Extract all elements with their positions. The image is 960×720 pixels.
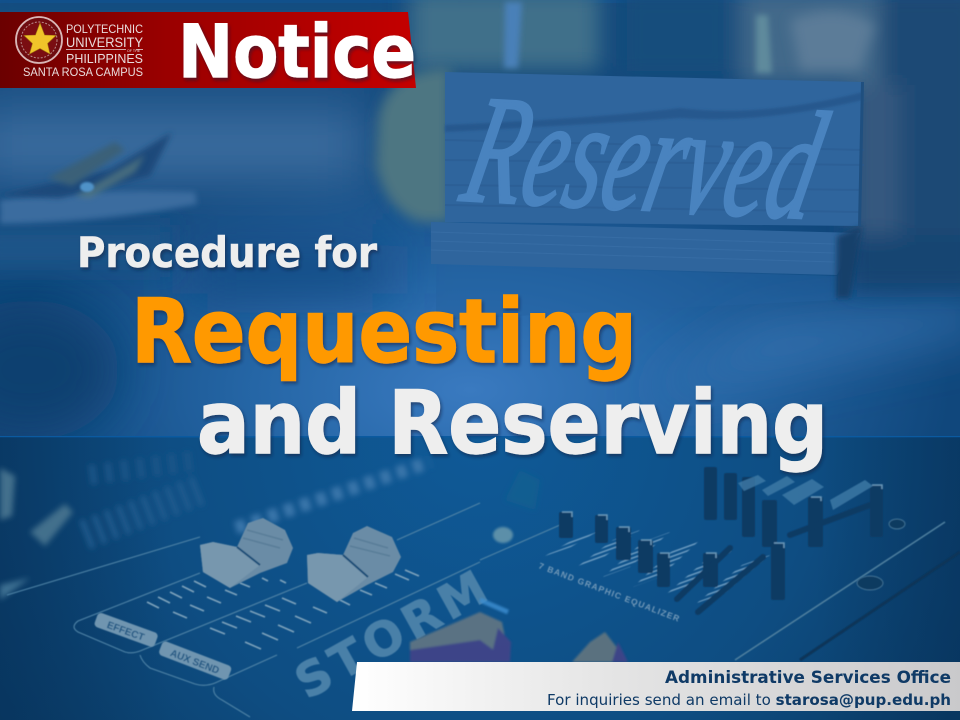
mixer labels: AUX SEND <box>168 648 221 677</box>
mixer labels: STORM <box>286 561 496 710</box>
header banner: red notice ribbon <box>0 10 416 95</box>
title: requesting: Requesting <box>131 280 637 383</box>
university name: SANTA ROSA CAMPUS <box>23 65 143 79</box>
university name: PHILIPPINES <box>66 51 143 66</box>
title: procedure for: Procedure for <box>77 228 377 277</box>
reserved wooden sign <box>431 63 864 320</box>
university name: UNIVERSITY <box>66 35 143 50</box>
fader scale ticks <box>147 570 419 649</box>
background photo: reserved sign on a table <box>0 0 960 440</box>
icon: university seal with gold star <box>16 17 62 63</box>
mixer labels: EFFECT <box>105 620 146 644</box>
university name: OF THE <box>127 49 141 53</box>
mixer labels: 7 BAND GRAPHIC EQUALIZER <box>537 561 681 624</box>
university name: POLYTECHNIC <box>66 22 143 36</box>
inquiries line: For inquiries send an email to starosa@pup.edu.ph <box>547 691 951 709</box>
panel outlines printed on mixer <box>7 503 960 717</box>
green blurred object left of sign <box>376 68 450 222</box>
coloured fader caps <box>410 600 628 662</box>
notice heading: Notice <box>178 10 416 95</box>
blurred rear controls <box>0 460 540 600</box>
background photo: audio mixer <box>0 436 960 720</box>
title: and reserving: and Reserving <box>197 372 828 474</box>
office name: Administrative Services Office <box>665 668 951 688</box>
blurred plant stem <box>504 2 522 68</box>
mixer labels <box>93 561 681 710</box>
university name <box>23 22 143 79</box>
fader knobs <box>200 518 401 602</box>
graphic equalizer sliders <box>493 467 905 612</box>
blurred pen and paper stack <box>0 132 197 224</box>
footer bar: contact information <box>352 662 960 711</box>
